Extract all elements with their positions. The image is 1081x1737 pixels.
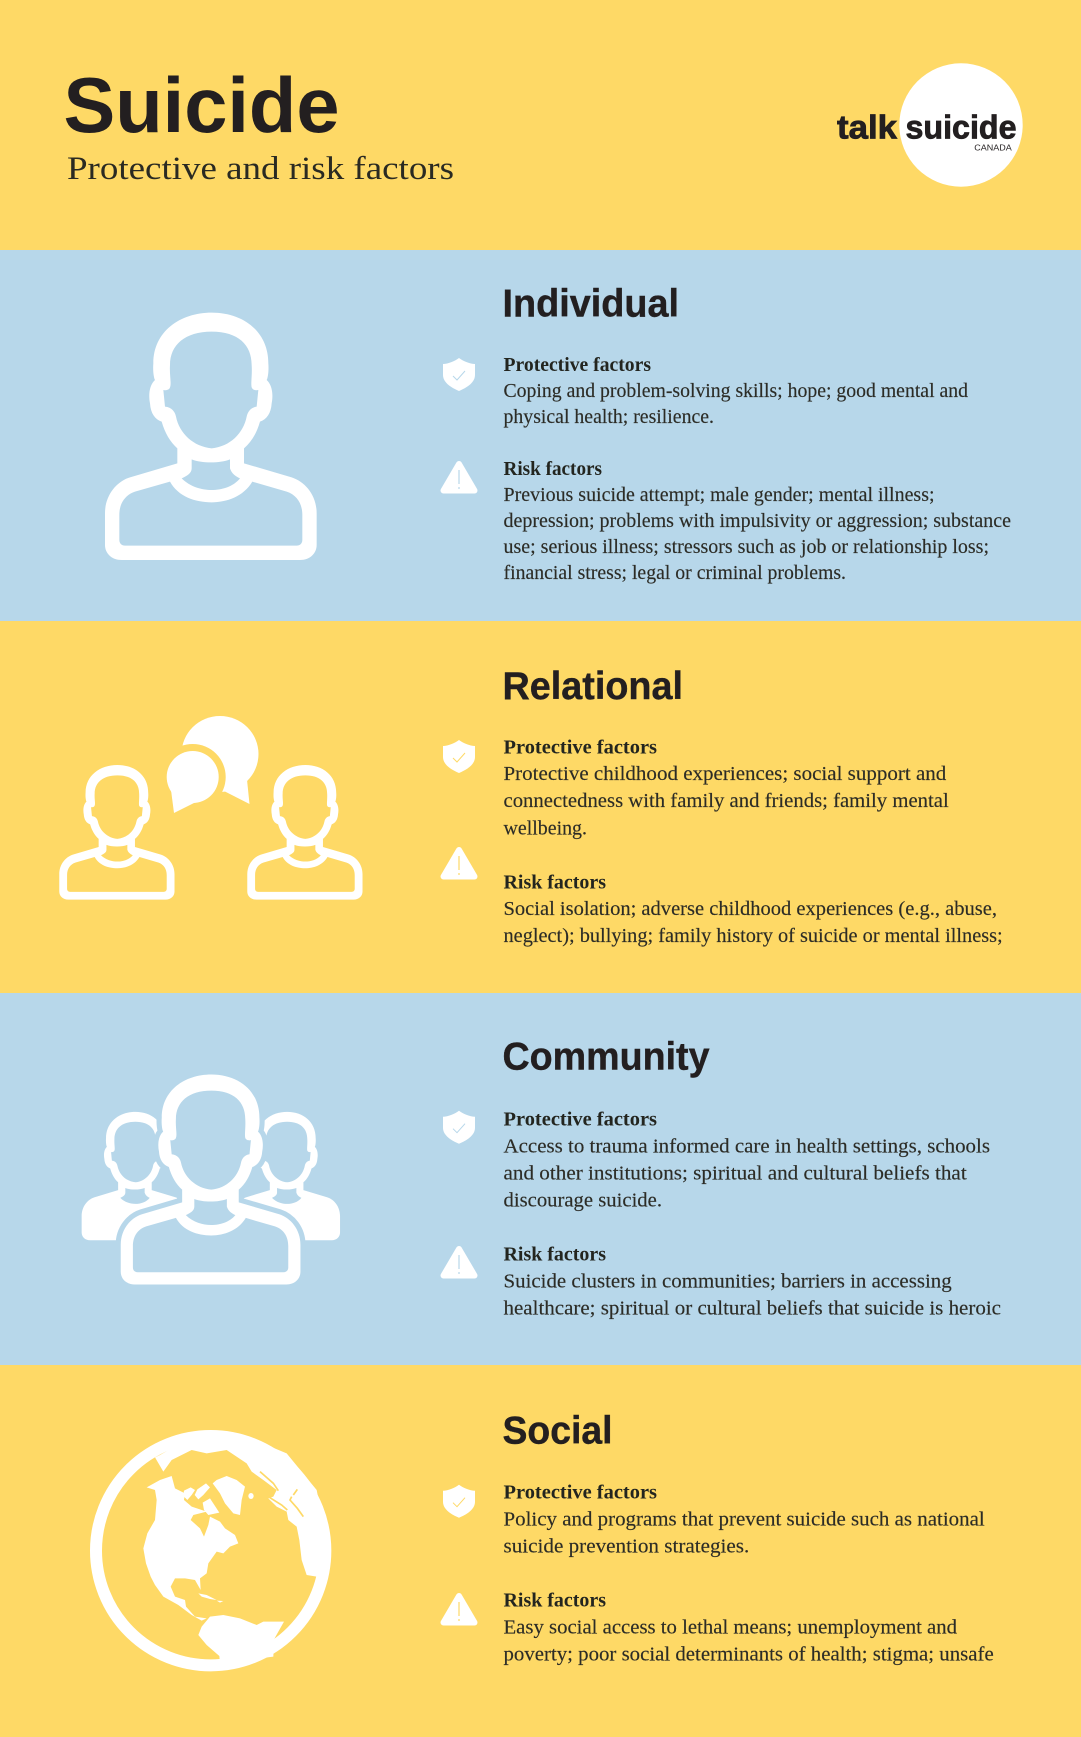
icon: globe (96, 1433, 327, 1665)
protective factors text: connectedness with family and friends; family mental (504, 790, 949, 812)
risk factors text: neglect); bullying; family history of suicide or mental illness; (504, 925, 1003, 947)
protective factors text: Protective factors (504, 1109, 657, 1130)
protective factors text: physical health; resilience. (504, 406, 714, 428)
risk factors text: Risk factors (504, 872, 606, 893)
risk factors text (504, 459, 1011, 584)
logo: Talk Suicide Canada: talk (837, 108, 898, 145)
icon: shield (443, 740, 475, 773)
protective factors text: suicide prevention strategies. (504, 1535, 749, 1557)
protective factors text (504, 1482, 985, 1557)
protective factors text: Access to trauma informed care in health settings, schools (504, 1136, 990, 1158)
risk factors text: Previous suicide attempt; male gender; mental illness; (504, 484, 934, 506)
risk factors text: healthcare; spiritual or cultural beliefs that suicide is heroic (504, 1298, 1001, 1320)
icon: two people talking (59, 716, 363, 900)
subtitle: Protective and risk factors (67, 151, 454, 187)
risk factors text (504, 1591, 994, 1665)
icon: single person (105, 313, 317, 560)
icon: warning triangle (444, 850, 474, 876)
risk factors text (504, 1244, 1001, 1320)
risk factors text: Risk factors (504, 1244, 606, 1265)
icon: warning triangle (444, 1596, 474, 1622)
risk factors text: financial stress; legal or criminal problems. (504, 562, 846, 584)
risk factors text: poverty; poor social determinants of health; stigma; unsafe (504, 1643, 994, 1665)
heading: relational: Relational (502, 665, 683, 708)
icon: group of three people (82, 1074, 340, 1284)
icon: warning triangle (444, 464, 474, 490)
risk factors text (504, 872, 1003, 947)
icon: shield (443, 1485, 475, 1518)
protective factors text (504, 1109, 990, 1212)
risk factors text: Risk factors (504, 1591, 606, 1612)
protective factors text: Protective factors (504, 737, 657, 758)
panel: community (0, 993, 1081, 1365)
logo: Talk Suicide Canada: CANADA (974, 143, 1012, 153)
protective factors text: Coping and problem-solving skills; hope; good mental and (504, 380, 968, 402)
protective factors text (504, 737, 949, 839)
protective factors text: Policy and programs that prevent suicide such as national (504, 1508, 985, 1530)
panel: social (0, 1365, 1081, 1737)
risk factors text: Suicide clusters in communities; barriers in accessing (504, 1271, 952, 1293)
protective factors text (504, 355, 968, 428)
protective factors text: wellbeing. (504, 817, 587, 839)
heading: community: Community (502, 1035, 710, 1078)
risk factors text: use; serious illness; stressors such as job or relationship loss; (504, 536, 989, 558)
heading: social: Social (502, 1409, 612, 1452)
risk factors text: Easy social access to lethal means; unemployment and (504, 1616, 957, 1638)
panel: header (0, 0, 1081, 250)
risk factors text: depression; problems with impulsivity or aggression; substance (504, 510, 1011, 532)
protective factors text: Protective factors (504, 1482, 657, 1503)
protective factors text: Protective childhood experiences; social support and (504, 763, 946, 785)
protective factors text: and other institutions; spiritual and cultural beliefs that (504, 1163, 967, 1185)
risk factors text: Social isolation; adverse childhood experiences (e.g., abuse, (504, 898, 997, 920)
title: Suicide (64, 61, 340, 149)
icon: shield (443, 1111, 475, 1144)
panel: individual (0, 250, 1081, 621)
icon: shield (443, 358, 475, 391)
icon: warning triangle (444, 1249, 474, 1276)
heading: individual: Individual (502, 282, 679, 326)
logo: Talk Suicide Canada: suicide (906, 108, 1016, 145)
risk factors text: Risk factors (504, 459, 602, 480)
logo: Talk Suicide Canada (837, 63, 1023, 187)
protective factors text: discourage suicide. (504, 1190, 662, 1212)
protective factors text: Protective factors (504, 355, 651, 376)
panel: relational (0, 621, 1081, 993)
